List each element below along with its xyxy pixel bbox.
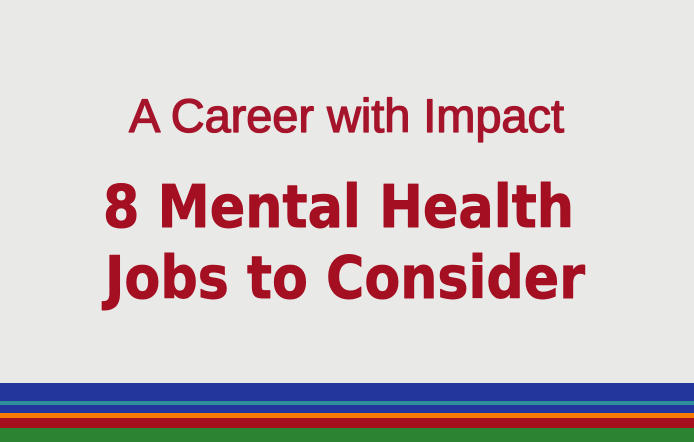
decorative colour stripes bbox=[0, 383, 694, 442]
title: 8 Mental Health Jobs to Consider: Jobs to Consider bbox=[101, 243, 585, 312]
title: 8 Mental Health Jobs to Consider: 8 Mental Health bbox=[103, 172, 574, 241]
title: 8 Mental Health Jobs to Consider bbox=[101, 172, 585, 312]
subtitle: A Career with Impact: A Career with Impact bbox=[129, 89, 564, 142]
